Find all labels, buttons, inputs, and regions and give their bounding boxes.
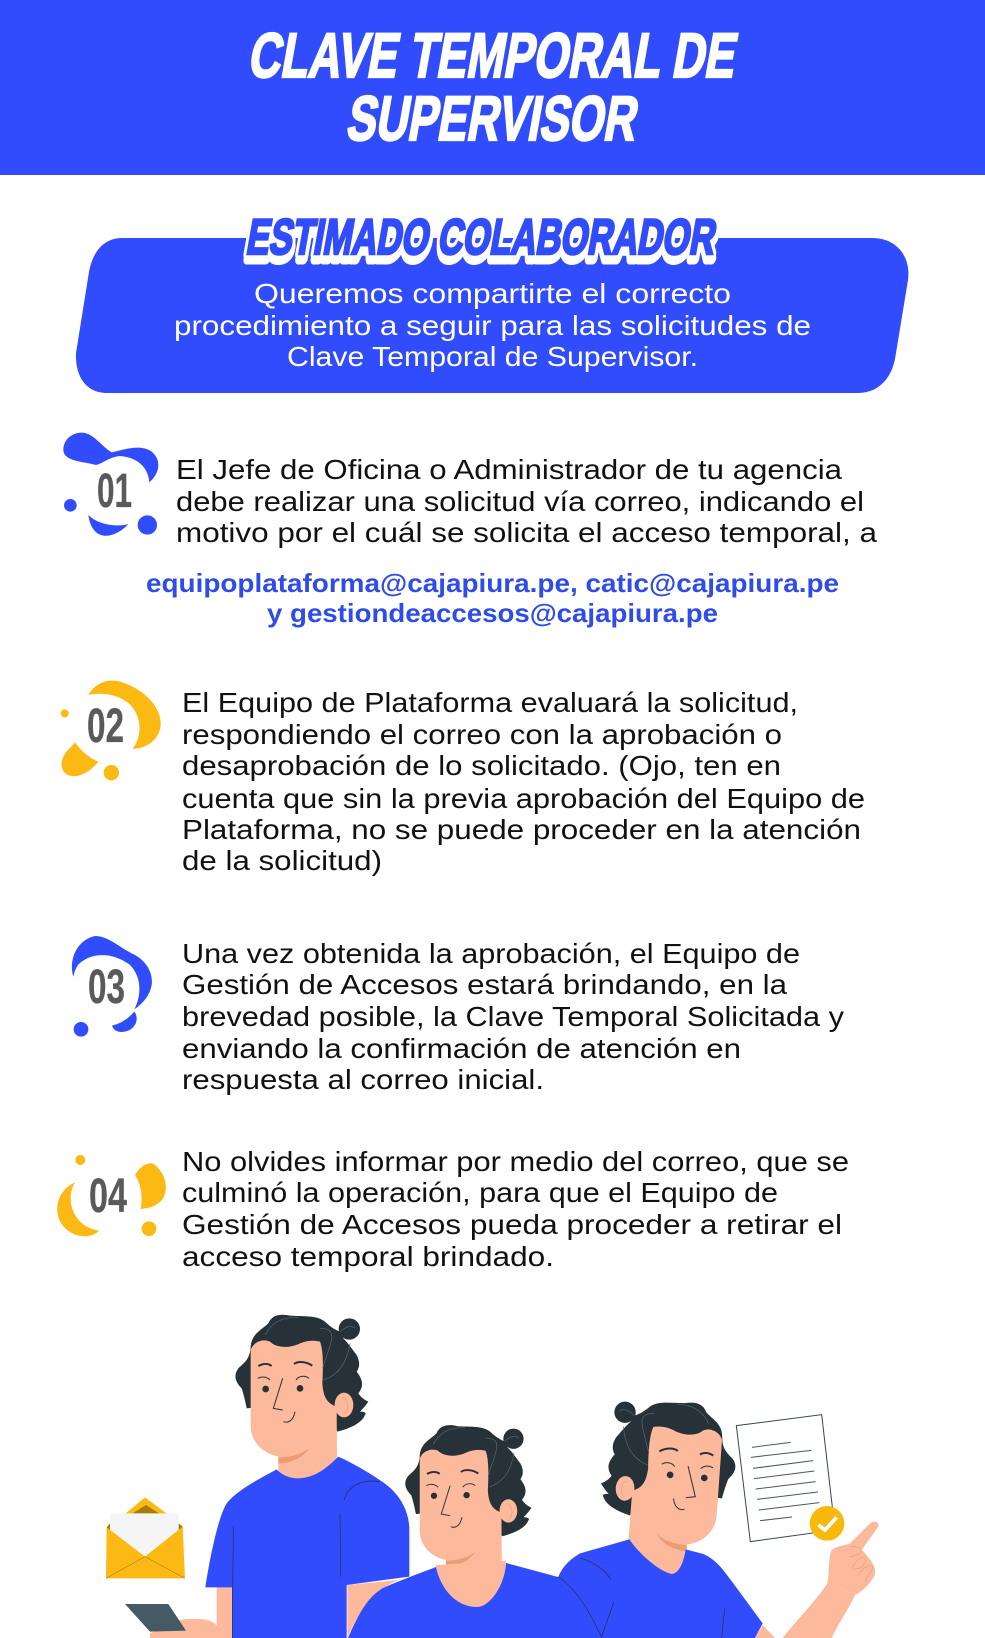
step 4 text bbox=[182, 1146, 849, 1272]
step 3 text: enviando la confirmación de atención en bbox=[182, 1033, 741, 1064]
step 2 bbox=[61, 681, 865, 876]
person in centre bbox=[348, 1425, 602, 1638]
step 2 text: desaprobación de lo solicitado. (Ojo, ten en bbox=[182, 750, 781, 781]
step 1 text bbox=[176, 454, 878, 548]
icon: envelope bbox=[106, 1497, 185, 1578]
step 4 bbox=[57, 1146, 849, 1272]
step 1 text: debe realizar una solicitud vía correo, indicando el bbox=[176, 486, 864, 517]
person pointing bbox=[558, 1397, 879, 1638]
step 1 text: motivo por el cuál se solicita el acceso temporal, a bbox=[176, 517, 878, 548]
icon: badge 04 bbox=[57, 1155, 166, 1236]
title: SUPERVISOR bbox=[343, 84, 644, 154]
number 03: 03 bbox=[88, 961, 125, 1014]
number 02: 02 bbox=[87, 700, 124, 753]
step 1 bbox=[63, 433, 878, 628]
step 1 text: El Jefe de Oficina o Administrador de tu agencia bbox=[176, 454, 843, 485]
icon: check badge bbox=[810, 1506, 844, 1541]
step 3 text bbox=[182, 938, 844, 1095]
step 4 text: No olvides informar por medio del correo, que se bbox=[182, 1146, 849, 1177]
step 4 text: culminó la operación, para que el Equipo de bbox=[182, 1177, 778, 1208]
step 3 text: respuesta al correo inicial. bbox=[182, 1064, 544, 1095]
illustration: three workers bbox=[106, 1315, 879, 1638]
step 2 text bbox=[182, 687, 865, 876]
step 2 text: de la solicitud) bbox=[182, 845, 382, 876]
email addresses: equipoplataforma@cajapiura.pe, catic@cajapiura.pe bbox=[146, 568, 839, 598]
title: CLAVE TEMPORAL DE bbox=[245, 21, 743, 91]
icon: document bbox=[736, 1415, 835, 1542]
step 3 bbox=[72, 936, 844, 1095]
step 4 text: Gestión de Accesos pueda proceder a retirar el bbox=[182, 1209, 842, 1240]
step 3 text: brevedad posible, la Clave Temporal Solicitada y bbox=[182, 1001, 844, 1032]
step 3 text: Gestión de Accesos estará brindando, en la bbox=[182, 969, 788, 1000]
person with phone bbox=[125, 1315, 409, 1638]
heading: estimado colaborador: ESTIMADO COLABORADOR bbox=[243, 213, 721, 270]
intro text: Queremos compartirte el correcto bbox=[254, 278, 731, 309]
icon: badge 03 bbox=[72, 936, 152, 1037]
intro text bbox=[174, 278, 811, 372]
title bbox=[245, 21, 743, 154]
heading: estimado colaborador: ESTIMADO COLABORADOR bbox=[243, 208, 721, 265]
step 2 text: respondiendo el correo con la aprobación o bbox=[182, 719, 782, 750]
panel: intro bbox=[76, 208, 908, 393]
heading: estimado colaborador bbox=[243, 208, 721, 270]
number 01: 01 bbox=[97, 465, 132, 518]
heading: estimado colaborador: ESTIMADO COLABORADOR bbox=[243, 208, 721, 265]
email addresses: y gestiondeaccesos@cajapiura.pe bbox=[267, 598, 718, 628]
step 2 text: cuenta que sin la previa aprobación del Equipo de bbox=[182, 783, 865, 814]
intro text: Clave Temporal de Supervisor. bbox=[287, 341, 698, 372]
step 3 text: Una vez obtenida la aprobación, el Equipo de bbox=[182, 938, 800, 969]
step 2 text: El Equipo de Plataforma evaluará la solicitud, bbox=[182, 687, 798, 718]
icon: badge 01 bbox=[63, 433, 158, 536]
intro text: procedimiento a seguir para las solicitudes de bbox=[174, 310, 811, 341]
header band bbox=[0, 0, 985, 175]
email addresses bbox=[146, 568, 839, 628]
number 04: 04 bbox=[89, 1170, 127, 1223]
panel background bbox=[76, 238, 908, 393]
icon: badge 02 bbox=[61, 681, 161, 780]
step 2 text: Plataforma, no se puede proceder en la atención bbox=[182, 814, 861, 845]
step 4 text: acceso temporal brindado. bbox=[182, 1241, 554, 1272]
